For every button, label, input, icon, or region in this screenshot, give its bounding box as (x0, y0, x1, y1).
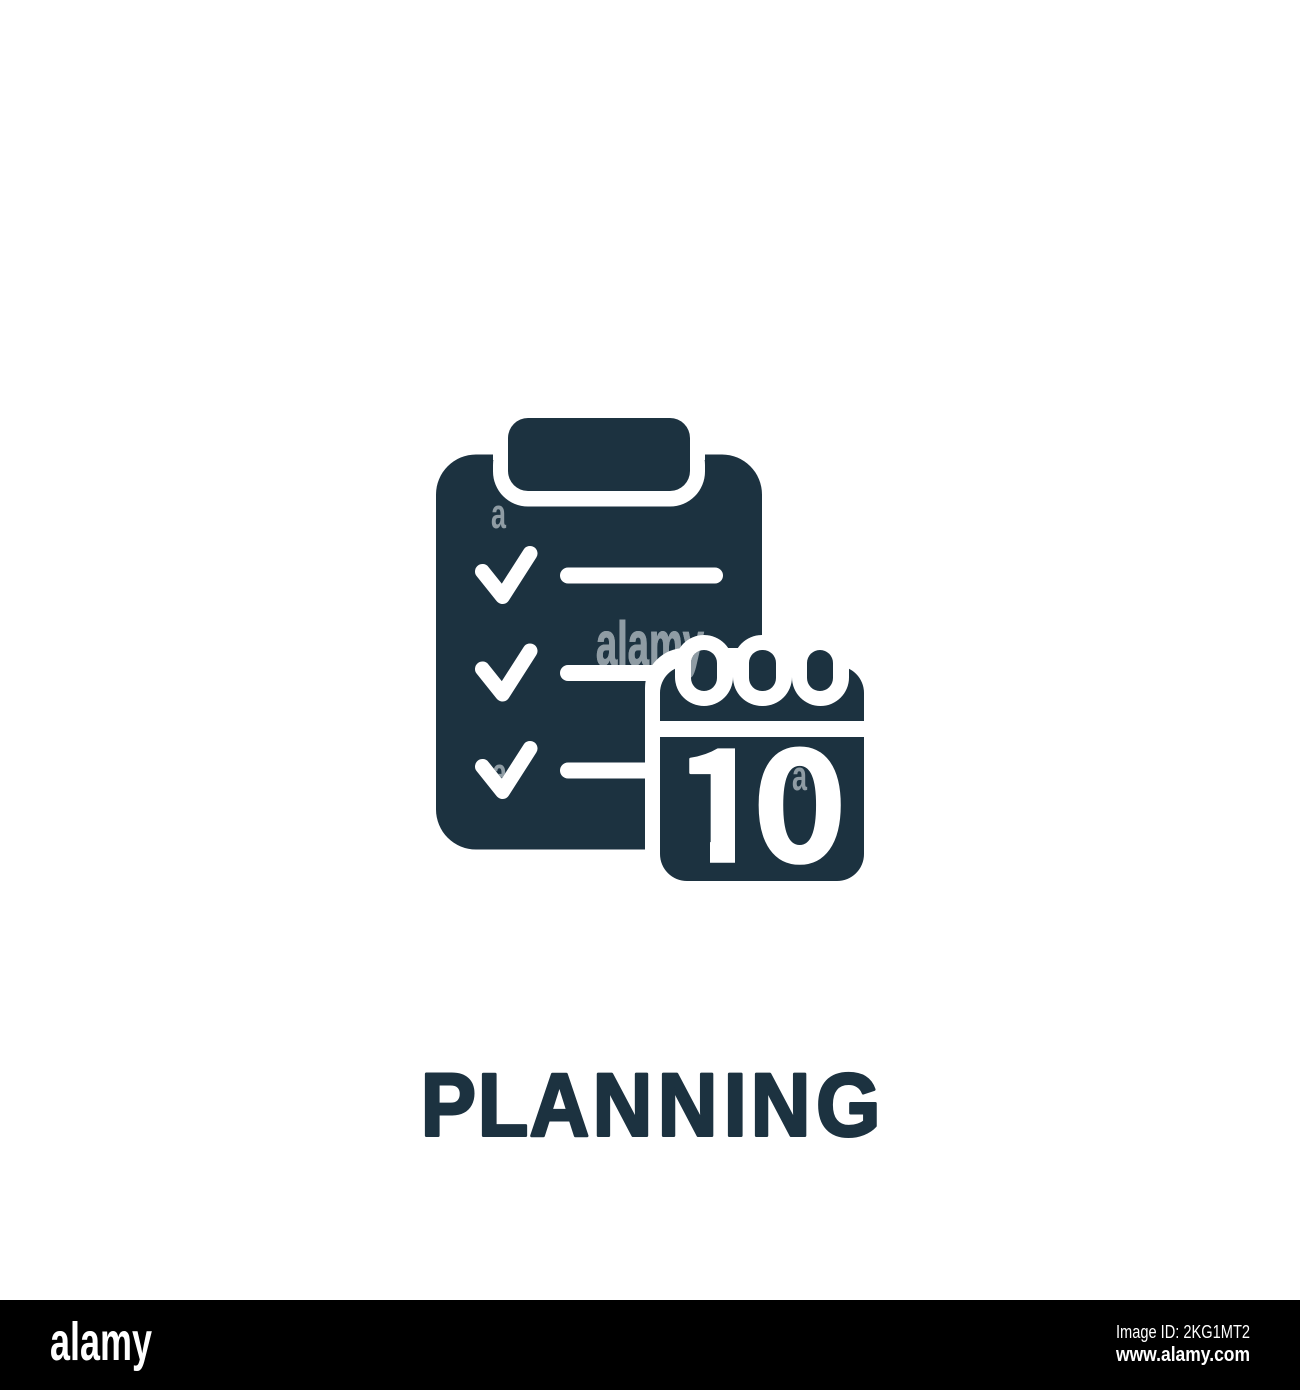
watermark: tail of alamy inside first ring: alamy (596, 610, 704, 679)
image id: Image ID: 2KG1MT2 (1116, 1322, 1250, 1342)
title: PLANNING (421, 1056, 881, 1155)
calendar date number: 10 (674, 686, 846, 905)
watermark: small a in zero: a (792, 752, 807, 799)
clipboard clip (493, 418, 705, 506)
calendar halo (645, 648, 879, 896)
icon: clipboard with checklist (436, 418, 762, 850)
calendar body (660, 666, 864, 881)
watermark: small a top: a (491, 490, 506, 537)
checklist row 2 (482, 651, 660, 694)
footer bar (0, 1300, 1300, 1390)
checklist row 3 (482, 748, 660, 792)
watermark: small a on third check: a (492, 749, 507, 796)
watermark: alamy centre: alamy (596, 610, 704, 679)
calendar divider (645, 721, 879, 737)
calendar rings (675, 635, 849, 706)
icon: calendar (645, 635, 879, 905)
checklist row 1 (482, 554, 715, 596)
website: www.alamy.com (1115, 1344, 1250, 1366)
clipboard board (436, 454, 762, 850)
footer logo: alamy (50, 1312, 152, 1372)
